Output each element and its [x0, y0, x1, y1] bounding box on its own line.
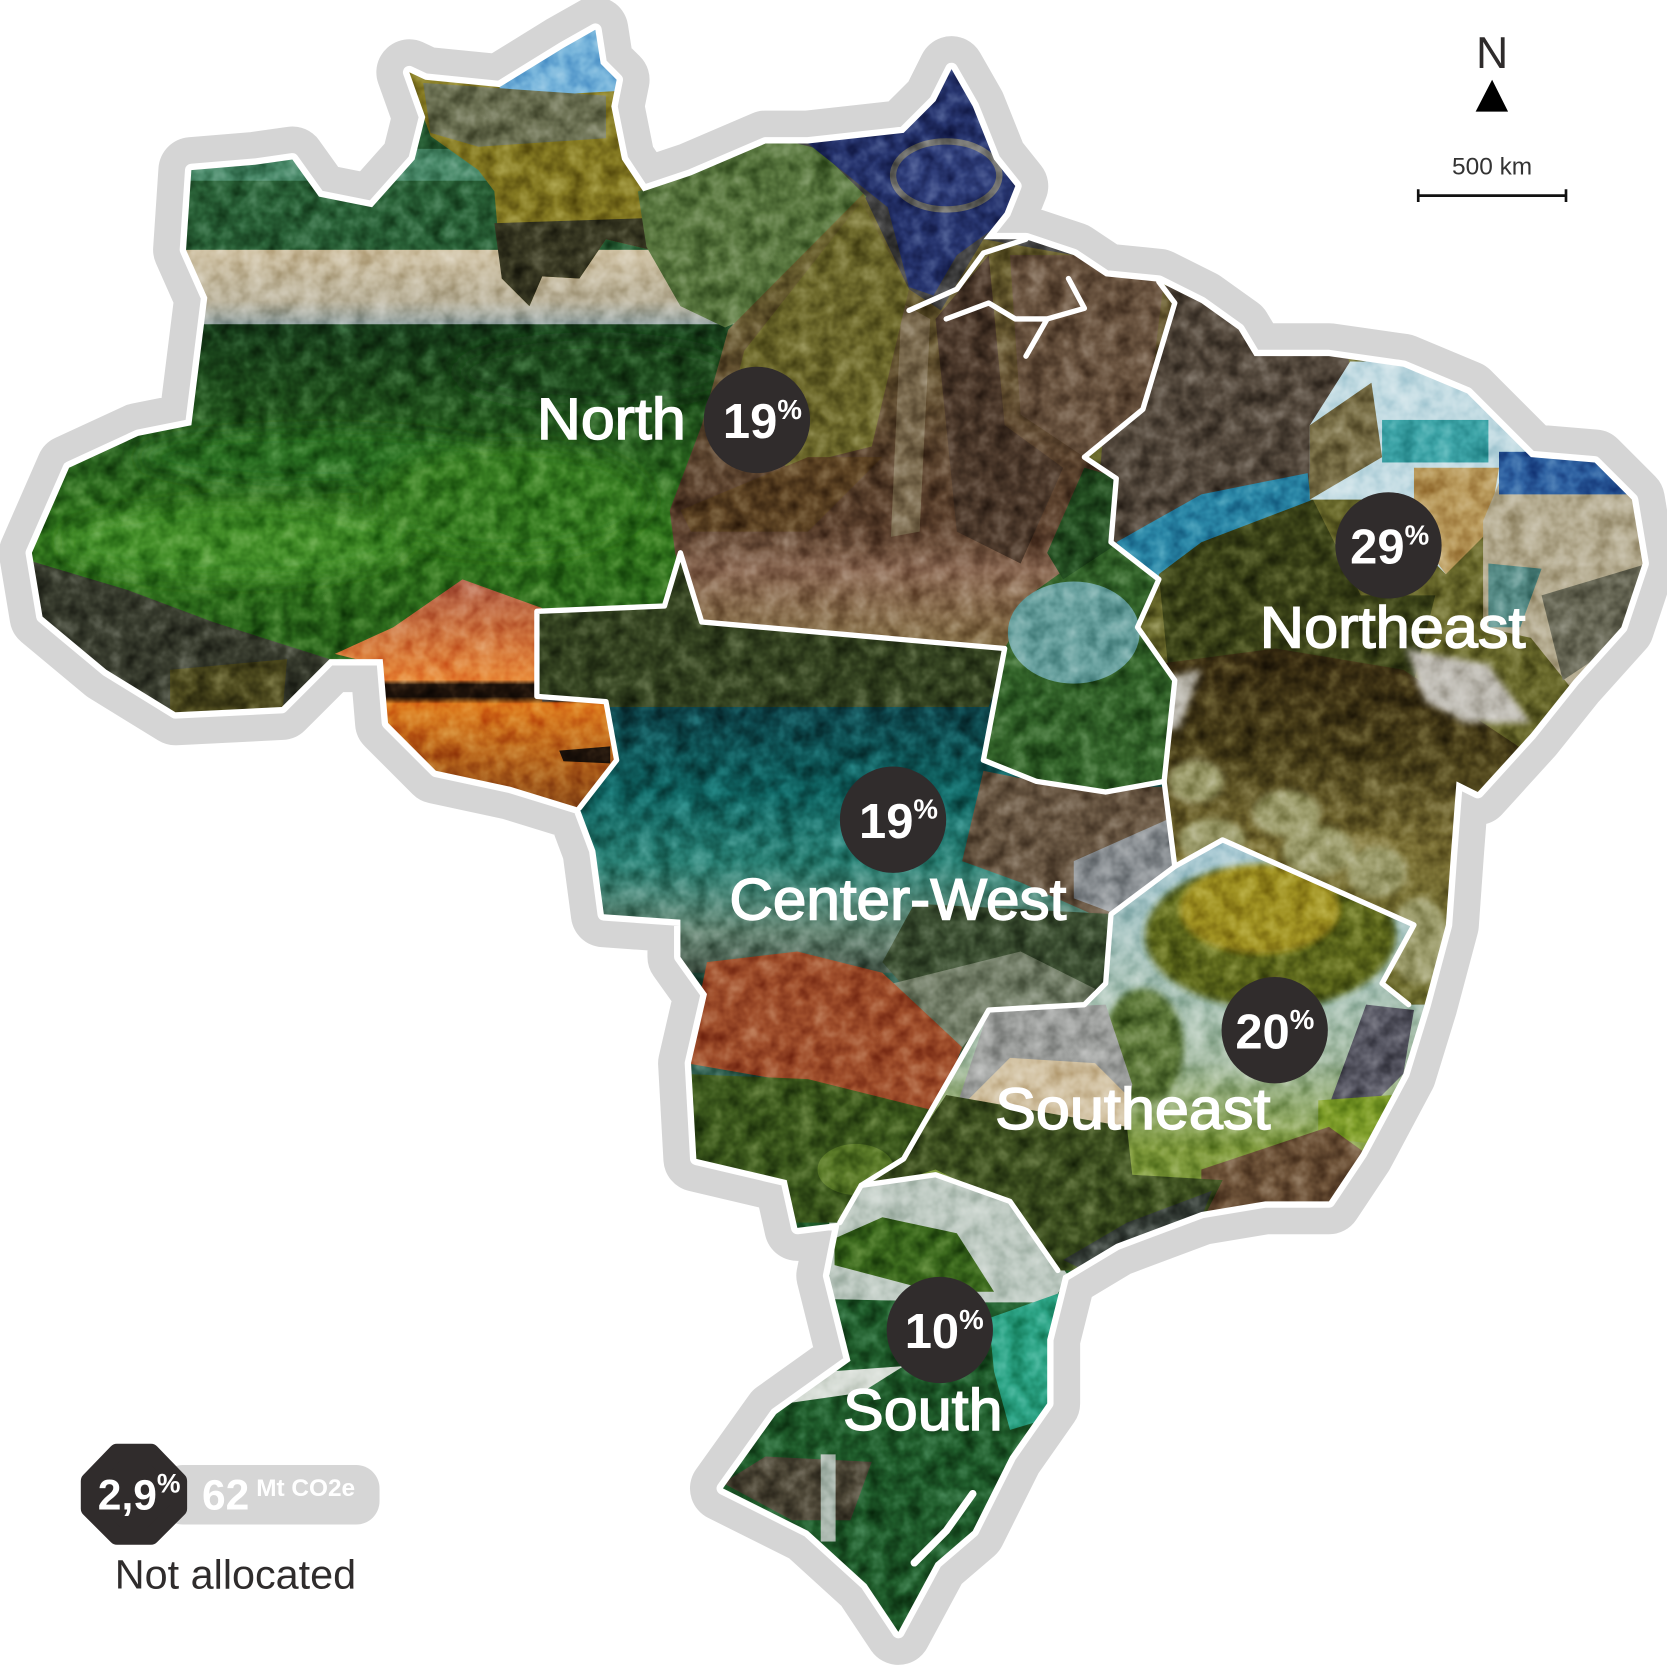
photo: rocks and waterfall [962, 771, 1180, 925]
photo: blue cave water [1116, 473, 1313, 585]
caption: Not allocated [115, 1551, 356, 1597]
badge: North 19%: 19 [723, 395, 777, 449]
label: South: South [843, 1378, 1003, 1443]
badge: Center-West 19%: 19 [859, 795, 913, 849]
photo: grey rock ledges [893, 952, 1095, 1047]
badge: Northeast 29%: % [1405, 519, 1429, 550]
photo: white flower bushes [1168, 760, 1449, 983]
photo: dusk savanna [34, 562, 330, 709]
photo: giant buttress tree [670, 193, 1180, 654]
pill: 62 Mt CO2e: 62 [202, 1473, 249, 1520]
photo: red cliff [686, 952, 962, 1116]
badge: Northeast 29% [1335, 492, 1442, 599]
label: Center-West: Center-West [729, 868, 1066, 933]
badge: Northeast 29%: 29 [1350, 520, 1405, 574]
photo: crystal water [532, 696, 1191, 973]
photo: cactus [1159, 500, 1435, 680]
region: Center-West photo collage [532, 548, 1191, 1244]
badge: 2,9%: % [157, 1469, 181, 1499]
label: South [843, 1277, 1003, 1443]
photo: yellow flowering tree [1140, 858, 1402, 1008]
badge: 2,9%: 2,9 [98, 1473, 157, 1520]
badge: Center-West 19% [840, 767, 946, 873]
label: North [537, 367, 810, 473]
region: South photo collage [638, 1169, 1169, 1667]
photo: misty sky [787, 1366, 904, 1403]
photo: tepui table mountain [404, 21, 651, 306]
scale bar [1418, 153, 1566, 202]
photo: sand dunes [957, 1005, 1132, 1127]
photo: limestone cave [1100, 286, 1350, 546]
photo: forest highlights [64, 392, 665, 585]
badge: North 19% [704, 367, 810, 473]
legend: not allocated [89, 1452, 380, 1597]
region: North photo collage [0, 0, 1180, 819]
region borders [537, 239, 1414, 1563]
photo: canopy and lake [680, 1074, 936, 1239]
photo: rock peak [1329, 1005, 1414, 1106]
photo: cerrado plateau [1166, 648, 1519, 916]
photo: grey cloud patches [1154, 649, 1531, 734]
photo: palms [1102, 989, 1183, 1106]
north arrow: N [1476, 29, 1508, 78]
photo: palm beach [1310, 361, 1536, 574]
photo: blue pool in green canyon [986, 468, 1172, 790]
badge: Southeast 20% [1222, 977, 1328, 1083]
label: Southeast: Southeast [995, 1077, 1270, 1142]
photo: gallery forest [532, 548, 1010, 707]
photo: forest river [851, 1095, 1223, 1292]
label: Northeast [1260, 492, 1526, 660]
badge: Center-West 19%: % [913, 794, 938, 825]
photo: turquoise bay [989, 1292, 1063, 1430]
region: Southeast photo collage [874, 842, 1425, 1270]
photo: Iguazu falls [829, 1169, 1068, 1302]
photo: dunes and coast [1483, 452, 1648, 691]
photo: sunset river with canoe [335, 579, 627, 819]
badge: Southeast 20%: 20 [1235, 1005, 1290, 1059]
pill: 62 Mt CO2e [159, 1465, 380, 1525]
photo: river and treeline [186, 120, 735, 324]
scale bar: 500 km [1452, 153, 1532, 180]
photo: canyon cliff and waterfall [723, 1454, 872, 1542]
photo: green valley [1318, 1095, 1393, 1143]
badge: North 19%: % [777, 394, 802, 425]
photo: city lights [1201, 1127, 1366, 1217]
label: Southeast [995, 977, 1328, 1142]
badge: Southeast 20%: % [1290, 1004, 1314, 1035]
photo: rainforest [32, 324, 734, 660]
photo: acai baskets [808, 64, 1021, 296]
label: North: North [537, 387, 686, 452]
badge: South 10% [887, 1277, 993, 1383]
photo: dark green valley [882, 904, 1116, 1053]
badge: South 10%: % [959, 1304, 984, 1335]
badge: South 10%: 10 [905, 1305, 959, 1359]
pill: 62 Mt CO2e: Mt CO2e [256, 1475, 355, 1502]
north arrow [1476, 29, 1508, 112]
region: Northeast photo collage [1089, 284, 1642, 1004]
badge: 2,9% [89, 1452, 181, 1536]
label: Northeast: Northeast [1260, 595, 1526, 660]
photo: light jungle [638, 138, 866, 327]
label: Center-West [729, 767, 1066, 933]
